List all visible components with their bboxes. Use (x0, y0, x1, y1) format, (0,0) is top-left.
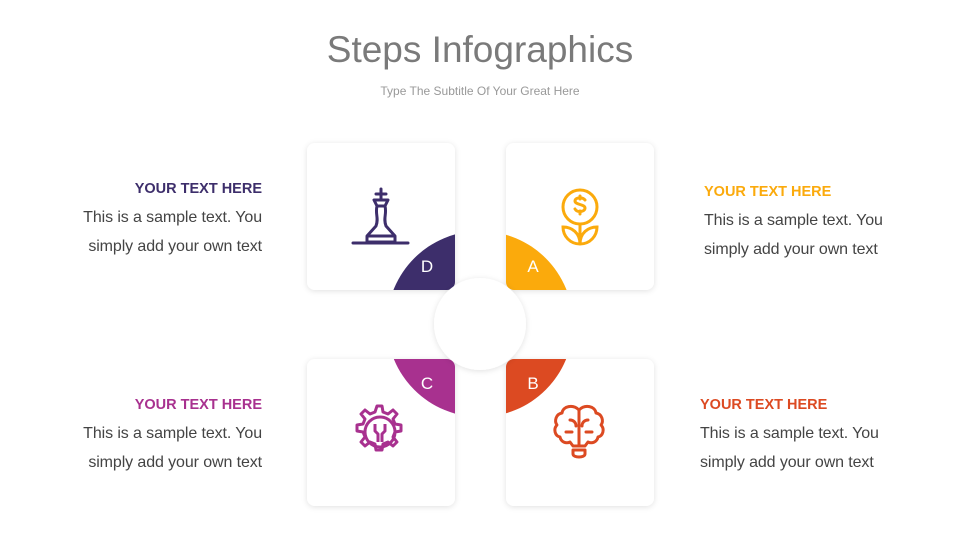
diagram (306, 142, 656, 508)
text block: D: YOUR TEXT HERE (135, 181, 262, 197)
title: Steps Infographics (327, 29, 633, 70)
text block: B: simply add your own text (700, 454, 874, 471)
card A (504, 142, 656, 292)
card D: D (421, 257, 433, 276)
text block: C: This is a sample text. You (83, 425, 262, 442)
card A: A (527, 257, 539, 276)
card C (306, 358, 456, 508)
card D (306, 142, 456, 292)
subtitle: Type The Subtitle Of Your Great Here (380, 84, 580, 98)
text block: C (83, 397, 262, 471)
card B: B (527, 374, 539, 393)
icon: gear wrench (357, 406, 401, 450)
text block: D (83, 181, 262, 255)
card B (504, 358, 656, 508)
text block: A: This is a sample text. You (704, 212, 883, 229)
text block: A: YOUR TEXT HERE (704, 184, 831, 200)
icon: chess king (353, 189, 408, 243)
text block: B (700, 397, 879, 471)
text block: D: This is a sample text. You (83, 209, 262, 226)
text block: D: simply add your own text (88, 238, 262, 255)
text block: B: YOUR TEXT HERE (700, 397, 827, 413)
text block: C: simply add your own text (88, 454, 262, 471)
text block: A: simply add your own text (704, 241, 878, 258)
icon: brain bulb (555, 406, 603, 457)
text block: A (704, 184, 883, 258)
icon: money flower (563, 190, 597, 244)
card C: C (421, 374, 433, 393)
center circle (434, 278, 526, 370)
text block: C: YOUR TEXT HERE (135, 397, 262, 413)
text block: B: This is a sample text. You (700, 425, 879, 442)
